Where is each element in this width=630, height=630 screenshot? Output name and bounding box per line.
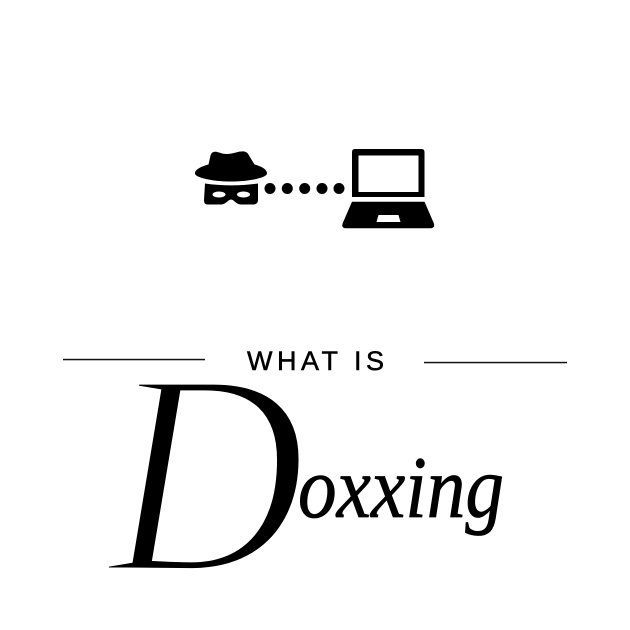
title: Doxxing [104,313,504,630]
divider: right rule [424,362,567,363]
dotted connector [264,183,344,194]
heading: WHAT IS: WHAT IS [247,346,384,376]
icon: masked spy with hat [195,151,267,204]
icon: laptop [342,149,434,228]
title: Doxxing: oxxing [298,440,504,537]
divider: left rule [63,359,205,360]
title: Doxxing: D [104,313,306,630]
